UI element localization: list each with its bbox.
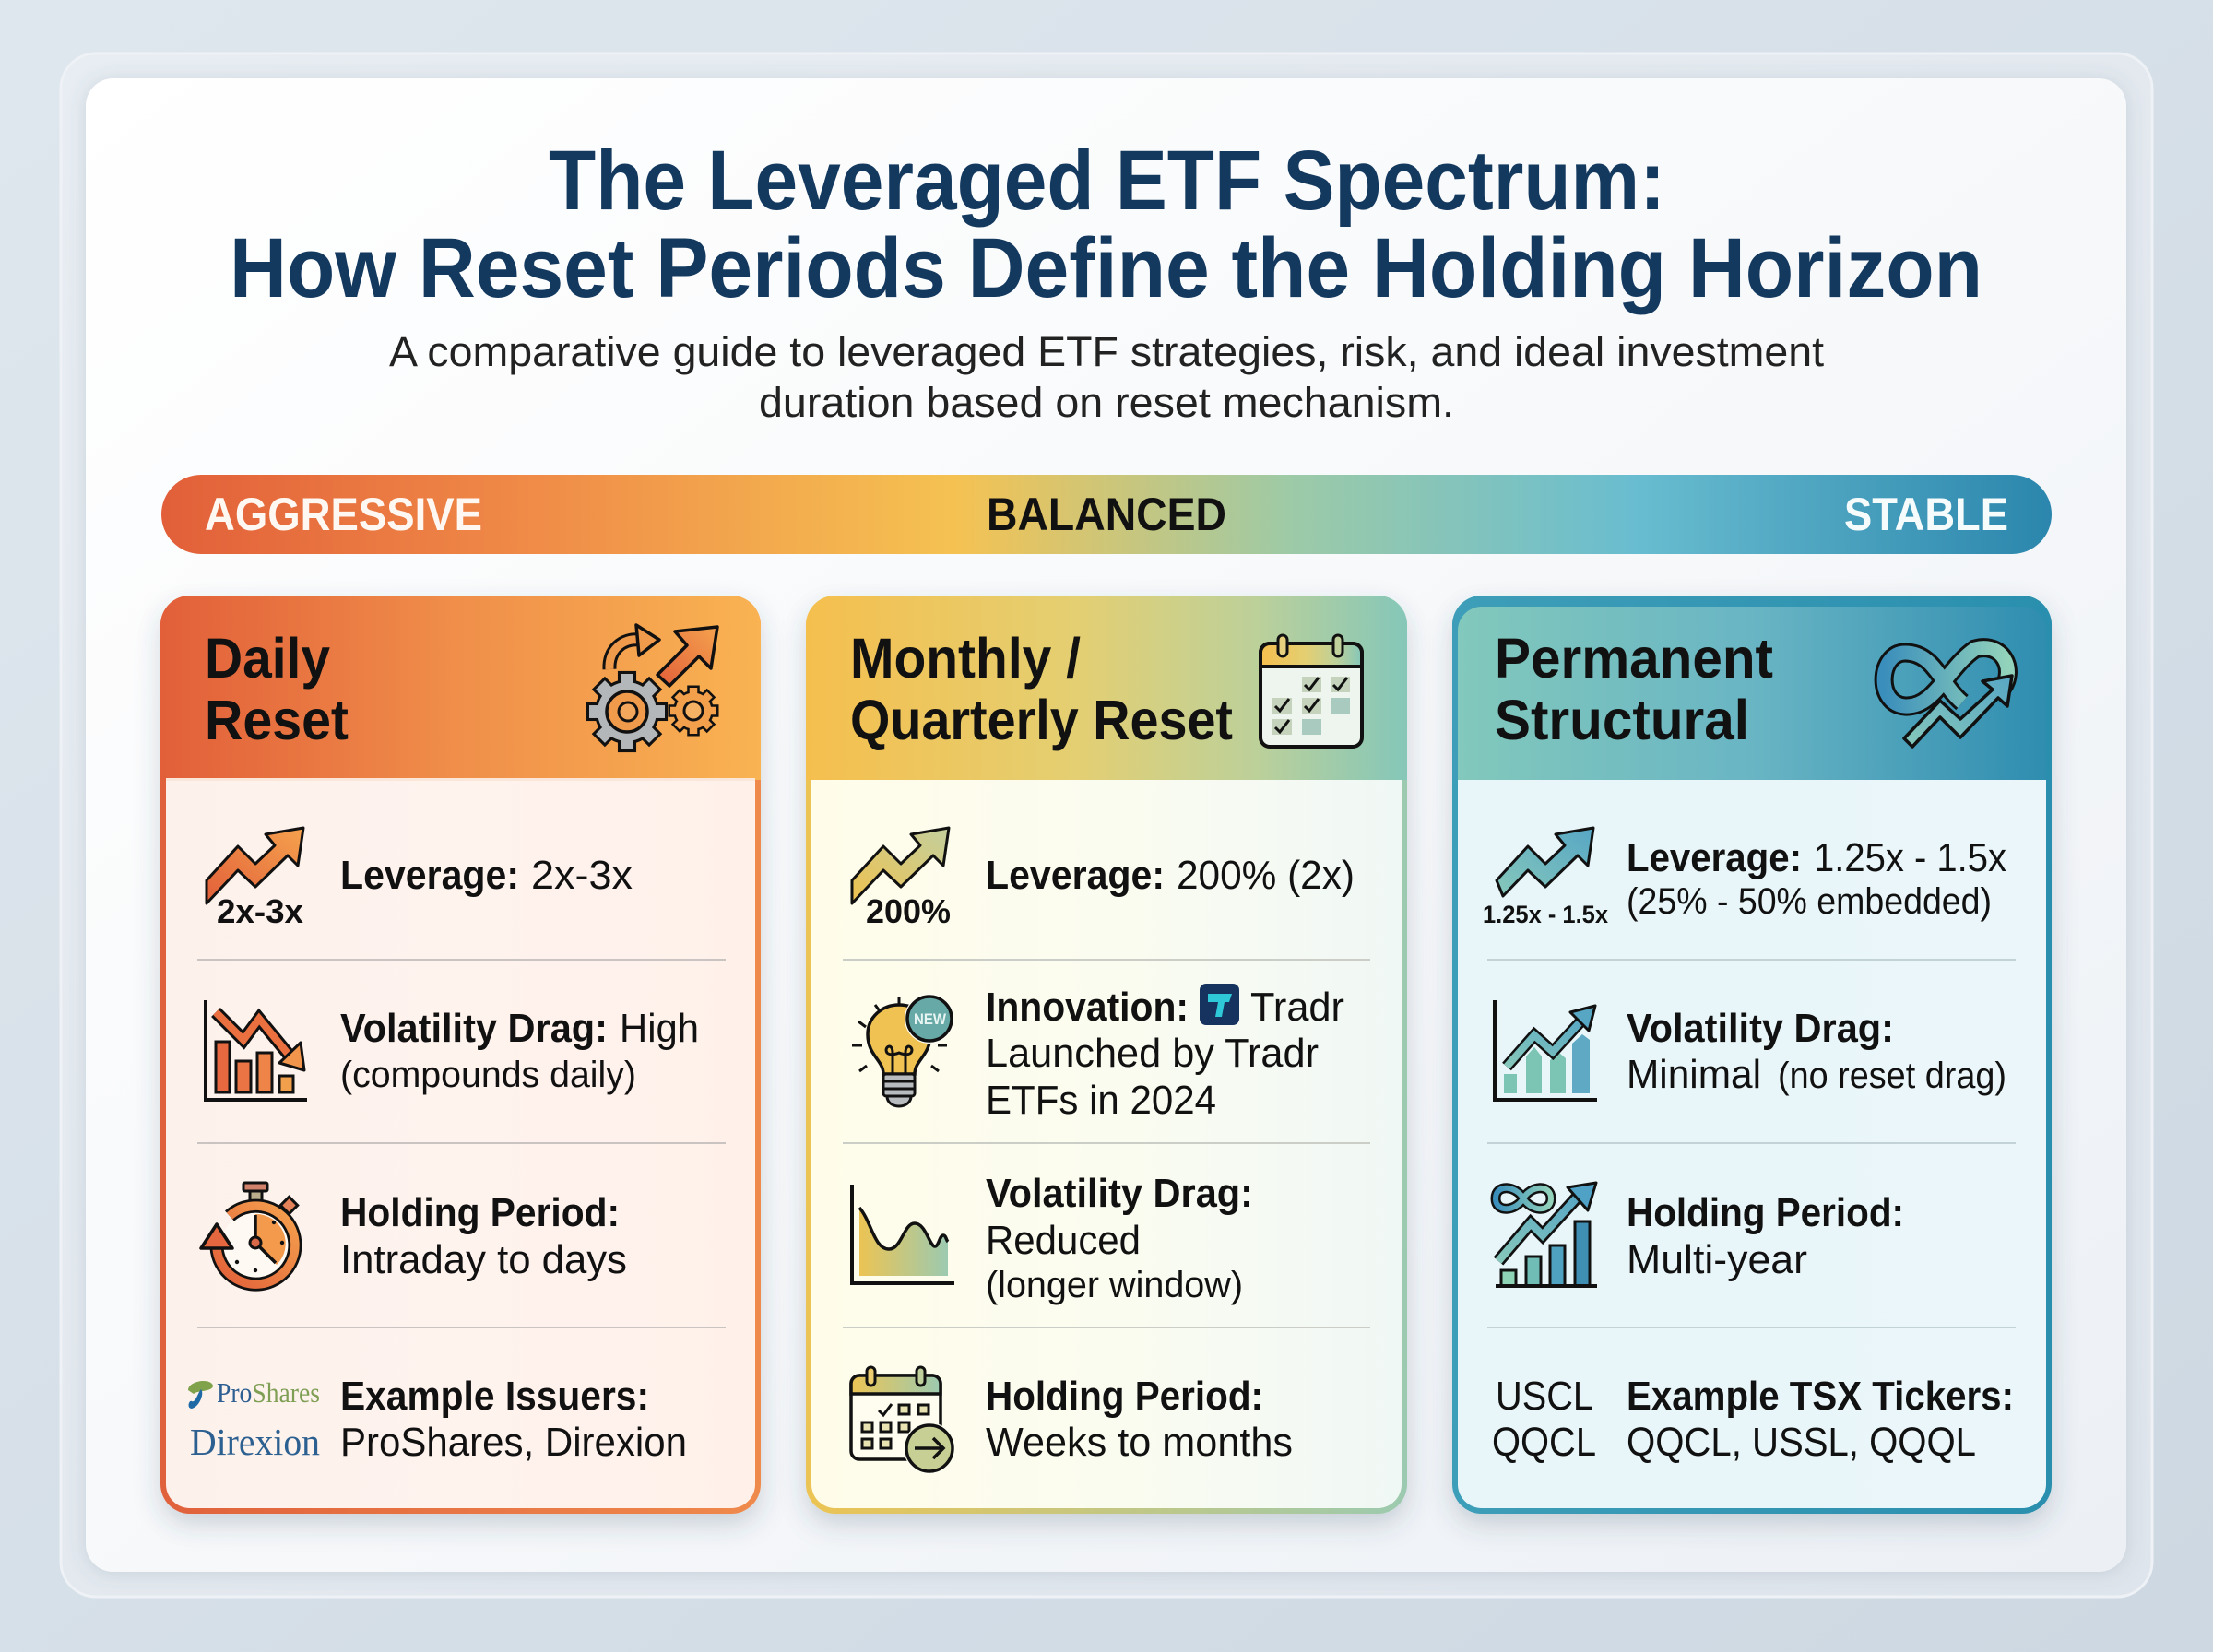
- icon: stopwatch: [201, 1183, 298, 1284]
- text: volatility drag: (compounds daily): [340, 1055, 636, 1095]
- text: volatility drag: Minimal: [1627, 1052, 1761, 1097]
- panel: monthly / quarterly reset: [806, 596, 1407, 1514]
- text: volatility drag: Volatility Drag:: [1627, 1006, 1894, 1051]
- row: volatility drag: [852, 1171, 1253, 1305]
- heading: daily reset: Daily: [205, 627, 330, 690]
- text: example tickers: QQCL, USSL, QQQL: [1627, 1420, 1976, 1465]
- subtitle: A comparative guide to leveraged ETF strategies, risk, and ideal investment: [389, 328, 1825, 375]
- icon: ticker labels: [1492, 1374, 1596, 1465]
- text: leverage: 1.25x - 1.5x: [1814, 835, 2006, 880]
- text: volatility drag: Volatility Drag:: [986, 1171, 1253, 1216]
- row: volatility drag: [1495, 1000, 2006, 1100]
- text: holding period: [986, 1374, 1293, 1465]
- text: volatility drag: (longer window): [986, 1265, 1243, 1305]
- heading: permanent structural: [1495, 627, 1773, 751]
- icon: rising arrow 2x-3x: 2x-3x: [217, 892, 303, 930]
- icon: falling bars: [206, 1000, 307, 1100]
- text: innovation: Innovation:: [986, 985, 1189, 1030]
- icon: issuer logos: Direxion: [190, 1421, 320, 1463]
- text: volatility drag: High: [620, 1006, 699, 1051]
- icon: rising arrow 1.25x-1.5x: 1.25x - 1.5x: [1483, 901, 1608, 928]
- text: innovation: ETFs in 2024: [986, 1078, 1216, 1123]
- text: leverage: Leverage:: [986, 853, 1165, 898]
- row: volatility drag: [206, 1000, 699, 1100]
- row: innovation: [852, 984, 1344, 1123]
- text: holding period: Holding Period:: [1627, 1190, 1904, 1235]
- heading: daily reset: Reset: [205, 689, 349, 751]
- label: stable: STABLE: [1844, 489, 2008, 540]
- text: volatility drag: [986, 1171, 1253, 1305]
- icon: tradr logo: [1200, 984, 1239, 1025]
- panel: daily reset: [160, 596, 761, 1514]
- icon: rising arrow 200%: 200%: [866, 892, 951, 930]
- text: leverage: [1627, 835, 2006, 922]
- row: leverage: [852, 828, 1355, 930]
- text: volatility drag: Reduced: [986, 1218, 1141, 1263]
- text: holding period: Intraday to days: [340, 1237, 627, 1282]
- text: holding period: [340, 1190, 627, 1282]
- text: holding period: Holding Period:: [340, 1190, 620, 1235]
- icon: area chart: [852, 1185, 954, 1283]
- icon: light bulb with new badge: [852, 994, 954, 1106]
- icon: ticker labels: QQCL: [1492, 1420, 1596, 1465]
- text: example issuers: Example Issuers:: [340, 1374, 649, 1419]
- icon: rising arrow 200%: [852, 828, 951, 930]
- text: holding period: Multi-year: [1627, 1237, 1807, 1282]
- text: volatility drag: [340, 1006, 699, 1095]
- label: aggressive: AGGRESSIVE: [205, 489, 482, 540]
- text: innovation: Tradr: [1250, 985, 1344, 1030]
- text: leverage: [986, 853, 1355, 898]
- text: holding period: [1627, 1190, 1904, 1282]
- heading: monthly / quarterly reset: [850, 627, 1233, 751]
- text: volatility drag: Volatility Drag:: [340, 1006, 608, 1051]
- text: volatility drag: (no reset drag): [1778, 1056, 2006, 1096]
- text: innovation: [986, 984, 1344, 1123]
- text: holding period: Weeks to months: [986, 1420, 1293, 1465]
- icon: light bulb with new badge: NEW: [914, 1010, 947, 1028]
- text: example issuers: ProShares, Direxion: [340, 1420, 687, 1465]
- text: example tickers: [1627, 1374, 2014, 1465]
- icon: calendar with arrow: [851, 1367, 955, 1474]
- subtitle: [389, 328, 1825, 426]
- text: leverage: Leverage:: [1627, 835, 1802, 880]
- icon: ticker labels: USCL: [1496, 1374, 1593, 1419]
- text: leverage: 2x-3x: [531, 853, 633, 898]
- row: leverage: [1483, 828, 2006, 928]
- title: [230, 134, 1982, 315]
- text: leverage: (25% - 50% embedded): [1627, 881, 1992, 922]
- subtitle: duration based on reset mechanism.: [759, 379, 1454, 426]
- row: example issuers: [188, 1374, 687, 1465]
- icon: infinity and growth bars: [1496, 1183, 1597, 1286]
- heading: daily reset: [205, 627, 349, 751]
- text: leverage: [340, 853, 633, 898]
- heading: monthly / quarterly reset: Quarterly Reset: [850, 689, 1233, 751]
- icon: rising arrow 2x-3x: [207, 828, 303, 930]
- text: innovation: Launched by Tradr: [986, 1031, 1319, 1076]
- icon: infinity with arrow: [1884, 648, 2012, 747]
- icon: issuer logos: [188, 1376, 320, 1463]
- heading: permanent structural: Structural: [1495, 689, 1749, 751]
- row: example tickers: [1492, 1374, 2014, 1465]
- row: leverage: [207, 828, 633, 930]
- text: holding period: Holding Period:: [986, 1374, 1263, 1419]
- text: example tickers: Example TSX Tickers:: [1627, 1374, 2014, 1419]
- icon: rising arrow 1.25x-1.5x: [1483, 828, 1608, 928]
- spectrum bar: [161, 475, 2052, 554]
- text: volatility drag: [1627, 1006, 2006, 1097]
- icon: gears with arrows: [589, 625, 717, 749]
- heading: permanent structural: Permanent: [1495, 627, 1773, 690]
- text: leverage: 200% (2x): [1177, 853, 1355, 898]
- title: How Reset Periods Define the Holding Horizon: [230, 221, 1982, 315]
- panel: permanent structural: [1452, 596, 2052, 1514]
- title: The Leveraged ETF Spectrum:: [549, 134, 1665, 228]
- label: balanced: BALANCED: [987, 489, 1226, 540]
- heading: monthly / quarterly reset: Monthly /: [850, 627, 1081, 690]
- icon: issuer logos: ProShares: [217, 1376, 320, 1409]
- row: holding period: [201, 1183, 627, 1284]
- text: example issuers: [340, 1374, 687, 1465]
- row: holding period: [851, 1367, 1293, 1474]
- icon: calendar with checks: [1260, 635, 1362, 747]
- icon: rising bars: [1495, 1000, 1597, 1100]
- row: holding period: [1496, 1183, 1904, 1286]
- text: leverage: Leverage:: [340, 853, 519, 898]
